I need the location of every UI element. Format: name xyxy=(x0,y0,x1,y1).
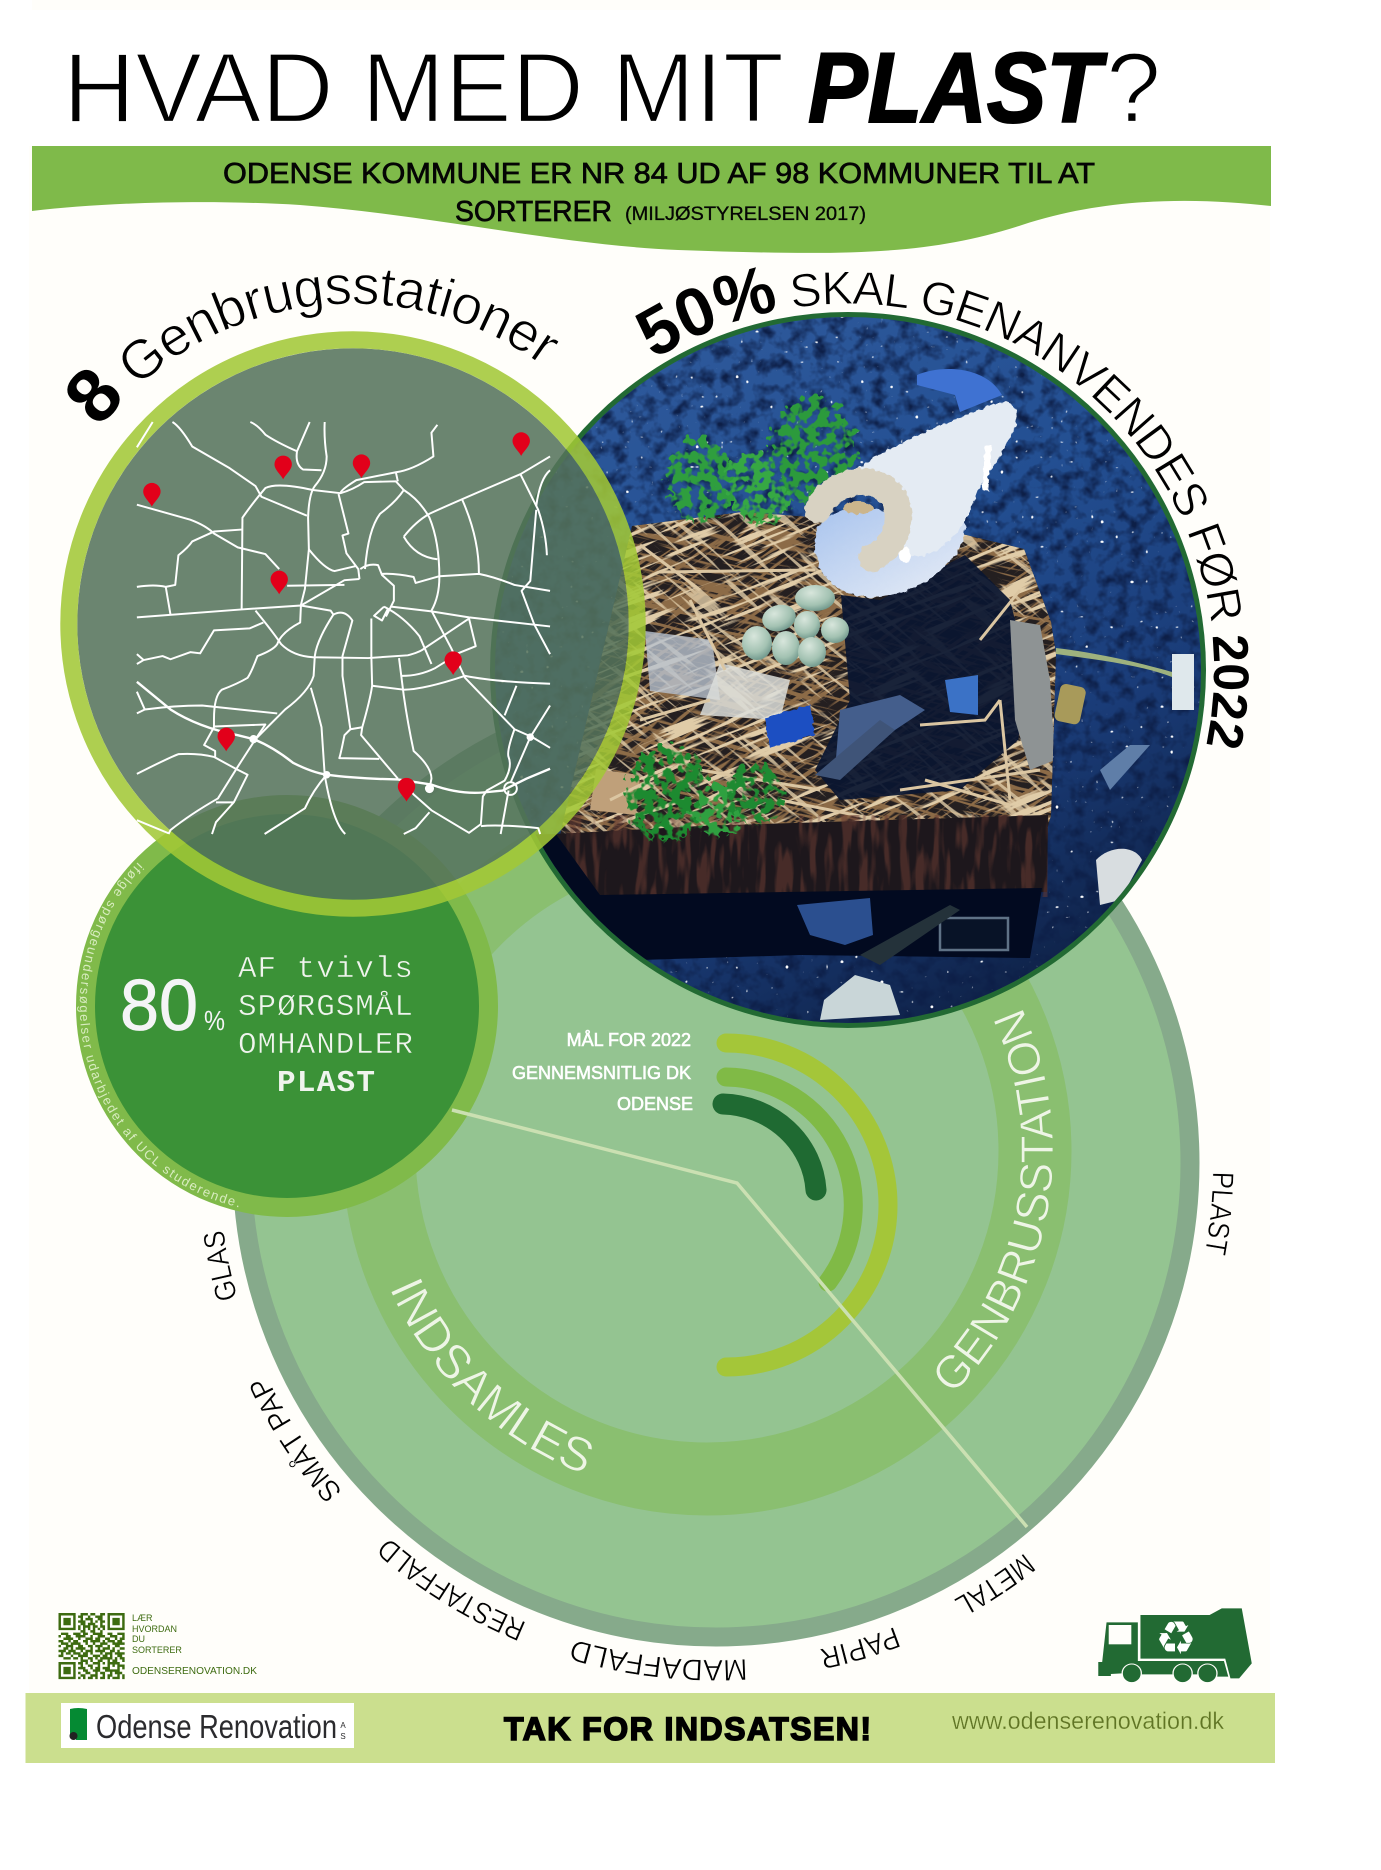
source note on ring: ifølge spørgeundersøgelser udarbjedet af UCL studerende. xyxy=(77,862,238,1208)
pointer line xyxy=(452,1110,1027,1527)
swan xyxy=(815,402,1017,597)
QR caption: ODENSERENOVATION.DK xyxy=(132,1666,257,1677)
statistic 80%: 80 xyxy=(120,966,198,1046)
rubbish on water xyxy=(765,705,815,748)
banner: ranking: SORTERER xyxy=(455,196,612,228)
platform front xyxy=(556,815,1048,896)
green plants xyxy=(626,398,854,843)
band label: genbrugsstation: GENBRUSSTATION xyxy=(936,1010,1053,1388)
icon: garbage truck xyxy=(1098,1608,1252,1683)
road network xyxy=(137,422,550,834)
QR caption: SORTERER xyxy=(132,1645,182,1655)
logo: Odense Renovation: S xyxy=(340,1732,346,1741)
title: PLAST xyxy=(808,32,1108,143)
heading: 8 genbrugsstationer: 8 Genbrugsstationer xyxy=(67,270,558,421)
QR caption xyxy=(132,1613,257,1677)
band ring xyxy=(379,823,1035,1479)
banner: ranking xyxy=(32,146,1271,253)
statistic caption: AF tvivls xyxy=(238,952,413,987)
statistic caption: SPØRGSMÅL xyxy=(238,990,413,1025)
chart legend: MÅL FOR 2022 xyxy=(567,1030,691,1050)
QR caption: HVORDAN xyxy=(132,1624,177,1634)
heading: 50% skal genanvendes: 50% SKAL GENANVENDES FØR 2022 xyxy=(635,267,1249,748)
statistic caption: OMHANDLER xyxy=(238,1028,413,1063)
thank you message: TAK FOR INDSATSEN! xyxy=(504,1711,871,1747)
title: HVAD MED MIT xyxy=(63,32,784,143)
title: ? xyxy=(1106,32,1161,143)
band label: indsamles: INDSAMLES xyxy=(392,1278,592,1471)
waste labels around circle: SMÅT PAP xyxy=(250,1382,340,1502)
statistic 80%: % xyxy=(204,1005,225,1036)
waste labels around circle: METAL xyxy=(954,1554,1036,1612)
map circle: recycling stations xyxy=(69,340,637,908)
photo: swan on plastic nest xyxy=(490,312,1206,1028)
eggs xyxy=(742,585,849,667)
statistic caption xyxy=(238,952,413,1101)
waste labels around circle: RESTAFFALD xyxy=(380,1541,525,1641)
chart legend: GENNEMSNITLIG DK xyxy=(512,1063,691,1083)
waste labels around circle xyxy=(204,1174,1234,1681)
banner: ranking: (MILJØSTYRELSEN 2017) xyxy=(625,204,866,225)
radial bar chart xyxy=(723,1043,888,1367)
waste labels around circle: PLAST xyxy=(1206,1174,1234,1256)
waste labels around circle: PAPIR xyxy=(820,1628,900,1668)
station pins xyxy=(143,432,530,802)
circle: 80 percent xyxy=(76,795,498,1217)
chart legend: ODENSE xyxy=(617,1094,693,1114)
dark hollow xyxy=(815,555,1030,800)
bag and tray in water xyxy=(797,898,873,945)
logo: Odense Renovation: A xyxy=(340,1721,346,1730)
title xyxy=(63,32,1161,143)
website: www.odenserenovation.dk xyxy=(951,1708,1225,1735)
statistic caption: PLAST xyxy=(277,1066,375,1101)
QR caption: LÆR xyxy=(132,1613,153,1623)
logo: Odense Renovation: Odense Renovation xyxy=(96,1708,337,1745)
chart legend xyxy=(512,1030,693,1114)
footer bar xyxy=(26,1693,1275,1763)
twigs xyxy=(610,545,1040,820)
dark waterline xyxy=(500,834,1042,960)
nest surface xyxy=(560,512,1056,835)
banner: ranking: ODENSE KOMMUNE ER NR 84 UD AF 98 KOMMUNER TIL AT xyxy=(223,158,1095,190)
icon: garbage truck: ♻ xyxy=(1155,1611,1197,1665)
logo: Odense Renovation xyxy=(61,1703,354,1748)
waste labels around circle: MADAFFALD xyxy=(571,1642,746,1681)
waste labels around circle: GLAS xyxy=(204,1232,236,1300)
blue bag xyxy=(917,369,1002,412)
QR caption: DU xyxy=(132,1634,145,1644)
big circle: recycling xyxy=(234,733,1200,1646)
QR code xyxy=(58,1613,125,1679)
